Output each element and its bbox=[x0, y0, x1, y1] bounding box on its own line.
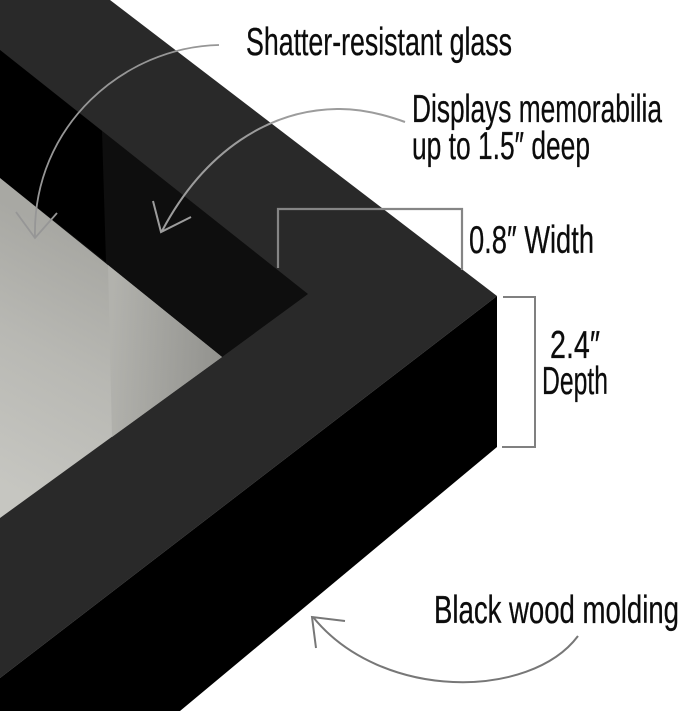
label: depth: Depth bbox=[542, 360, 608, 403]
label: depth bbox=[542, 324, 608, 403]
arrow: displays memorabilia bbox=[153, 109, 405, 232]
label: depth: 2.4″ bbox=[550, 324, 600, 367]
width bracket bbox=[278, 209, 462, 270]
glass interior bbox=[0, 50, 308, 357]
label: displays memorabilia: up to 1.5″ deep bbox=[412, 125, 590, 168]
label: width: 0.8″ Width bbox=[469, 219, 594, 262]
arrow: black wood molding bbox=[312, 617, 578, 682]
frame front side bbox=[0, 296, 497, 711]
frame top face bbox=[0, 0, 497, 678]
label: shatter-resistant glass: Shatter-resistant glass bbox=[246, 21, 512, 64]
label: displays memorabilia bbox=[412, 88, 662, 168]
depth bracket bbox=[502, 297, 535, 447]
arrow: shatter-resistant glass bbox=[16, 45, 219, 238]
backing paper bbox=[0, 178, 222, 518]
